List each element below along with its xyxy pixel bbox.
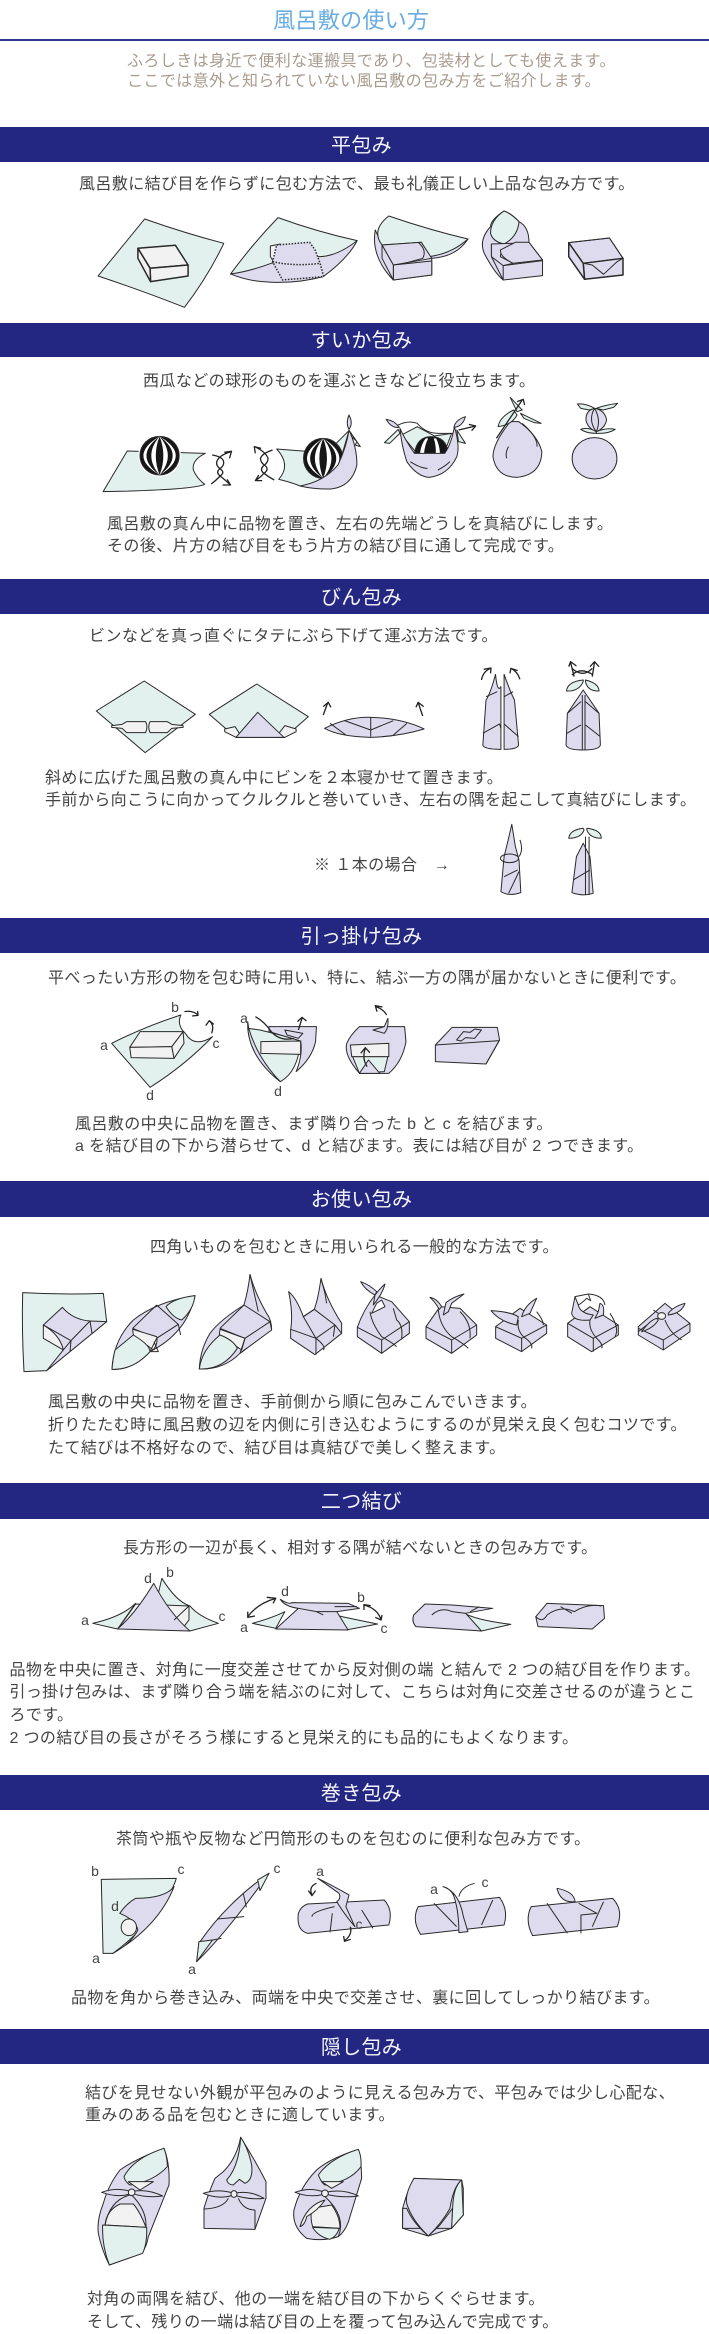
labels: 巻き包み letters: b: [91, 1863, 99, 1879]
title rule: [0, 39, 709, 41]
icon: bag pulled through knot: [493, 397, 542, 477]
heading: 引っ掛け包み: 引っ掛け包み: [301, 926, 422, 948]
icon: d and b raised: [93, 1578, 218, 1631]
icon: finished watermelon wrap: [572, 403, 618, 479]
icon: corner tucked with arrow: [294, 2149, 362, 2240]
labels: 巻き包み letters: d: [111, 1898, 119, 1914]
icon: finished flat wrap: [569, 238, 623, 279]
labels: 二つ結び letters: c: [380, 1620, 388, 1636]
icon: finished roll: [528, 1888, 620, 1936]
text: 二つ結び steps: 品物を中央に置き、対角に一度交差させてから反対側の端 と結んで 2 つの結び目を作ります。: [10, 1662, 700, 1678]
labels: 二つ結び letters: d: [144, 1570, 152, 1586]
icon: finished wrap: [435, 1027, 500, 1064]
labels: 巻き包み letters: a: [188, 1961, 196, 1977]
icon: one bottle, corner raised: [500, 824, 522, 894]
labels: 引っ掛け包み letters: a: [240, 1010, 248, 1026]
icon: d tied to b with arrows: [248, 1597, 382, 1630]
illustrations: 引っ掛け包み: [112, 1006, 500, 1087]
icon: corners raised: [481, 668, 520, 749]
text: 隠し包み description: [85, 2084, 675, 2124]
heading: 隠し包み: 隠し包み: [321, 2037, 402, 2059]
text: びん包み steps: 手前から向こうに向かってクルクルと巻いていき、左右の隅を起こして真結びにします。: [45, 792, 696, 809]
icon: near corner folded over box: [231, 218, 357, 282]
text: 巻き包み steps: 品物を角から巻き込み、両端を中央で交差させ、裏に回してしっかり結びます。: [71, 1990, 660, 2006]
text: びん包み steps: 斜めに広げた風呂敷の真ん中にビンを２本寝かせて置きます。: [45, 770, 503, 786]
heading: 引っ掛け包み: [0, 918, 709, 953]
heading: びん包み: [0, 579, 709, 614]
heading: 平包み: [0, 127, 709, 162]
icon: one corner folded around watermelon: [277, 415, 360, 489]
text: お使い包み steps: たて結びは不格好なので、結び目は真結びで美しく整えます。: [48, 1440, 506, 1456]
text: お使い包み steps: 風呂敷の中央に品物を置き、手前側から順に包みこんでいきます。: [48, 1394, 537, 1410]
icon: step 3: [199, 1274, 272, 1369]
illustrations: お使い包み, right steps: [357, 1282, 690, 1353]
icon: one corner passed under knot: [203, 2137, 266, 2229]
icon: step 1: [22, 1293, 107, 1372]
labels: 二つ結び letters: [81, 1564, 388, 1636]
heading: すいか包み: すいか包み: [311, 330, 412, 352]
text: 引っ掛け包み steps: 風呂敷の中央に品物を置き、まず隣り合った b と c を結びます。: [75, 1116, 553, 1132]
labels: 引っ掛け包み letters: d: [274, 1083, 282, 1099]
icon: knot tied two bottles: [566, 662, 600, 750]
labels: 巻き包み letters: c: [274, 1860, 280, 1876]
labels: 二つ結び letters: b: [357, 1589, 365, 1605]
illustrations: 平包み: [98, 211, 623, 307]
text: すいか包み description: 西瓜などの球形のものを運ぶときなどに役立ちます。: [143, 372, 535, 390]
icon: diagonal roll begins: [101, 1878, 176, 1953]
text: 二つ結び steps: 引っ掛け包みは、まず隣り合う端を結ぶのに対して、こちらは対角に交差させるのが違うとこ: [10, 1684, 695, 1701]
text: びん包み steps: [45, 769, 696, 809]
icon: corners tied, a lifted: [248, 1017, 316, 1082]
intro text: ここでは意外と知られていない風呂敷の包み方をご紹介します。: [127, 73, 601, 90]
heading: 平包み: 平包み: [331, 135, 392, 157]
text: お使い包み steps: [48, 1393, 687, 1456]
labels: 引っ掛け包み letters: b: [171, 999, 179, 1015]
text: お使い包み description: 四角いものを包むときに用いられる一般的な方法です。: [150, 1238, 559, 1256]
icon: roll with a and c crossed: [298, 1878, 390, 1941]
labels: 巻き包み letters: a: [316, 1863, 324, 1879]
labels: 二つ結び letters: a: [240, 1619, 248, 1635]
icon: finished knot: [536, 1603, 604, 1629]
icon: box on open cloth: [98, 219, 224, 307]
text: 二つ結び description: 長方形の一辺が長く、相対する隅が結べないときの包み方です。: [123, 1540, 598, 1556]
text: 巻き包み description: 茶筒や瓶や反物など円筒形のものを包むのに便利な包み方です。: [116, 1830, 591, 1848]
icon: folded once with far corner open: [374, 216, 468, 280]
icon: step 8: [568, 1294, 618, 1352]
text: 隠し包み description: 重みのある品を包むときに適しています。: [85, 2107, 395, 2124]
icon: diagonal corners tied: [98, 2148, 169, 2265]
labels: 巻き包み letters: c: [178, 1861, 184, 1877]
icon: both corners tied over watermelon: [384, 417, 476, 477]
heading: 巻き包み: 巻き包み: [321, 1783, 402, 1805]
text: 平包み description: 風呂敷に結び目を作らずに包む方法で、最も礼儀正しい上品な包み方です。: [79, 176, 635, 192]
icon: roll with ends up: [415, 1883, 506, 1934]
labels: 二つ結び letters: a: [81, 1612, 89, 1628]
text: すいか包み steps: [107, 515, 613, 555]
text: 隠し包み steps: そして、残りの一端は結び目の上を覆って包み込んで完成です。: [87, 2314, 559, 2330]
icon: step 2: [112, 1296, 195, 1369]
illustrations: びん包み: [96, 662, 601, 895]
icon: two bottles on diagonal cloth: [96, 681, 195, 753]
icon: finished hidden wrap: [403, 2178, 463, 2236]
icon: one bottle, finished: [569, 828, 601, 895]
heading: 二つ結び: 二つ結び: [321, 1491, 402, 1513]
icon: rolled diagonal strip: [197, 1873, 269, 1962]
illustrations: 二つ結び: [93, 1578, 604, 1631]
heading: 巻き包み: [0, 1775, 709, 1810]
text: すいか包み steps: その後、片方の結び目をもう片方の結び目に通して完成です。: [107, 538, 564, 555]
illustrations: 隠し包み: [98, 2137, 463, 2265]
text: 二つ結び steps: ろです。: [10, 1707, 73, 1724]
labels: 二つ結び letters: c: [218, 1608, 226, 1624]
icon: step 9: [638, 1303, 690, 1350]
labels: 巻き包み letters: c: [356, 1916, 362, 1932]
text: 引っ掛け包み steps: [75, 1115, 644, 1155]
heading: お使い包み: [0, 1181, 709, 1217]
text: お使い包み steps: 折りたたむ時に風呂敷の辺を内側に引き込むようにするのが見栄え良く包むコツです。: [48, 1416, 687, 1434]
labels: 二つ結び letters: b: [166, 1564, 174, 1580]
labels: 引っ掛け包み letters: d: [146, 1087, 154, 1103]
icon: step 6: [426, 1294, 477, 1353]
text: すいか包み steps: 風呂敷の真ん中に品物を置き、左右の先端どうしを真結びにします。: [107, 516, 613, 532]
text: one bottle note: ※ １本の場合 →: [314, 856, 450, 874]
labels: 引っ掛け包み letters: c: [212, 1035, 220, 1051]
labels: 二つ結び letters: d: [281, 1583, 289, 1599]
labels: 巻き包み letters: c: [482, 1874, 488, 1890]
title: 風呂敷の使い方: [273, 8, 429, 33]
icon: box on cloth with arrows: [112, 1011, 214, 1087]
heading: 隠し包み: [0, 2029, 709, 2064]
text: 二つ結び steps: [10, 1661, 700, 1747]
text: 隠し包み steps: [87, 2290, 559, 2330]
heading: すいか包み: [0, 323, 709, 357]
illustrations: お使い包み, left steps: [22, 1274, 342, 1372]
labels: 巻き包み letters: a: [430, 1881, 438, 1897]
text: びん包み description: ビンなどを真っ直ぐにタテにぶら下げて運ぶ方法です。: [89, 628, 498, 644]
text: 引っ掛け包み steps: a を結び目の下から潜らせて、d と結びます。表には結び目が 2 つできます。: [75, 1138, 644, 1155]
icon: twist arrows: [211, 447, 274, 485]
heading: お使い包み: お使い包み: [311, 1189, 412, 1211]
icon: rolled cloth: [323, 702, 424, 737]
icon: watermelon on cloth: [103, 435, 205, 492]
intro text: ふろしきは身近で便利な運搬具であり、包装材としても使えます。: [127, 52, 616, 70]
labels: 巻き包み letters: a: [92, 1950, 100, 1966]
illustrations: 巻き包み: [101, 1873, 620, 1962]
text: 隠し包み steps: 対角の両隅を結び、他の一端を結び目の下からくぐらせます。: [87, 2290, 545, 2308]
labels: 巻き包み letters: [91, 1860, 488, 1977]
intro text: [127, 52, 616, 90]
heading: 二つ結び: [0, 1483, 709, 1519]
labels: 引っ掛け包み letters: a: [100, 1037, 108, 1053]
icon: a passed under knot: [346, 1006, 406, 1073]
icon: near corner folded over bottles: [209, 684, 308, 737]
illustrations: すいか包み: [103, 397, 618, 492]
text: 二つ結び steps: 2 つの結び目の長さがそろう様にすると見栄え的にも品的にもよくなります。: [10, 1730, 578, 1747]
icon: step 7: [491, 1298, 547, 1352]
labels: 引っ掛け包み letters: [100, 999, 282, 1103]
heading: びん包み: びん包み: [321, 587, 402, 609]
icon: both ends folded: [413, 1604, 511, 1631]
text: 隠し包み description: 結びを見せない外観が平包みのように見える包み方で、平包みでは少し心配な、: [85, 2084, 675, 2102]
icon: side flaps folded: [482, 211, 543, 280]
icon: step 4: [289, 1278, 342, 1355]
text: 引っ掛け包み description: 平べったい方形の物を包む時に用い、特に、結ぶ一方の隅が届かないときに便利です。: [48, 970, 686, 986]
icon: step 5: [357, 1282, 409, 1353]
